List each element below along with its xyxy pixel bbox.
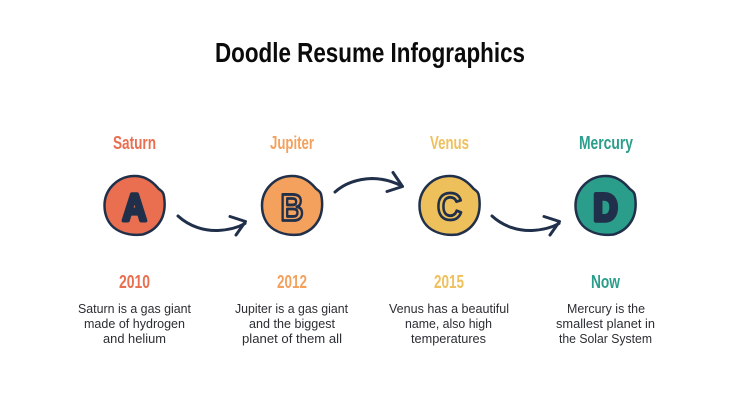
description: Venus: temperatures bbox=[411, 331, 486, 346]
arrow: Venus to Mercury bbox=[492, 216, 560, 235]
icon: badge C: C bbox=[437, 186, 462, 228]
description: Saturn: Saturn is a gas giant bbox=[78, 301, 191, 316]
description: Saturn: and helium bbox=[103, 331, 166, 346]
year: 2010: 2010 bbox=[119, 272, 150, 292]
icon: badge B: B bbox=[280, 188, 304, 230]
description: Venus: name, also high bbox=[405, 316, 492, 331]
icon: badge B bbox=[262, 176, 322, 235]
heading: Jupiter: Jupiter bbox=[270, 133, 314, 153]
column: Venus bbox=[389, 133, 509, 346]
description: Jupiter: Jupiter is a gas giant bbox=[235, 301, 348, 316]
description: Venus: Venus has a beautiful bbox=[389, 301, 509, 316]
description: Saturn: made of hydrogen bbox=[84, 316, 185, 331]
icon: badge A: A bbox=[122, 188, 146, 230]
heading: Venus: Venus bbox=[430, 133, 469, 153]
icon: badge D: D bbox=[594, 188, 618, 230]
description: Jupiter: planet of them all bbox=[242, 331, 342, 346]
description: Jupiter: and the biggest bbox=[249, 316, 335, 331]
heading: Mercury: Mercury bbox=[579, 133, 633, 153]
description: Jupiter bbox=[235, 301, 348, 346]
year: 2015: 2015 bbox=[434, 272, 464, 292]
icon: badge C bbox=[420, 176, 480, 235]
description: Saturn bbox=[78, 301, 191, 346]
description: Mercury: smallest planet in bbox=[556, 316, 655, 331]
description: Mercury: the Solar System bbox=[559, 331, 652, 346]
description: Venus bbox=[389, 301, 509, 346]
heading: Saturn: Saturn bbox=[113, 133, 156, 153]
arrow: Jupiter to Venus bbox=[335, 172, 402, 192]
icon: badge D bbox=[576, 176, 636, 235]
column: Saturn bbox=[78, 133, 191, 346]
column: Jupiter bbox=[235, 133, 348, 346]
column: Mercury bbox=[556, 133, 655, 346]
arrow: Saturn to Jupiter bbox=[178, 216, 246, 235]
year: Now: Now bbox=[591, 272, 621, 292]
year: 2012: 2012 bbox=[277, 272, 307, 292]
description: Mercury bbox=[556, 301, 655, 346]
icon: badge A bbox=[104, 176, 165, 235]
description: Mercury: Mercury is the bbox=[567, 301, 645, 316]
title: Doodle Resume Infographics bbox=[215, 37, 525, 68]
